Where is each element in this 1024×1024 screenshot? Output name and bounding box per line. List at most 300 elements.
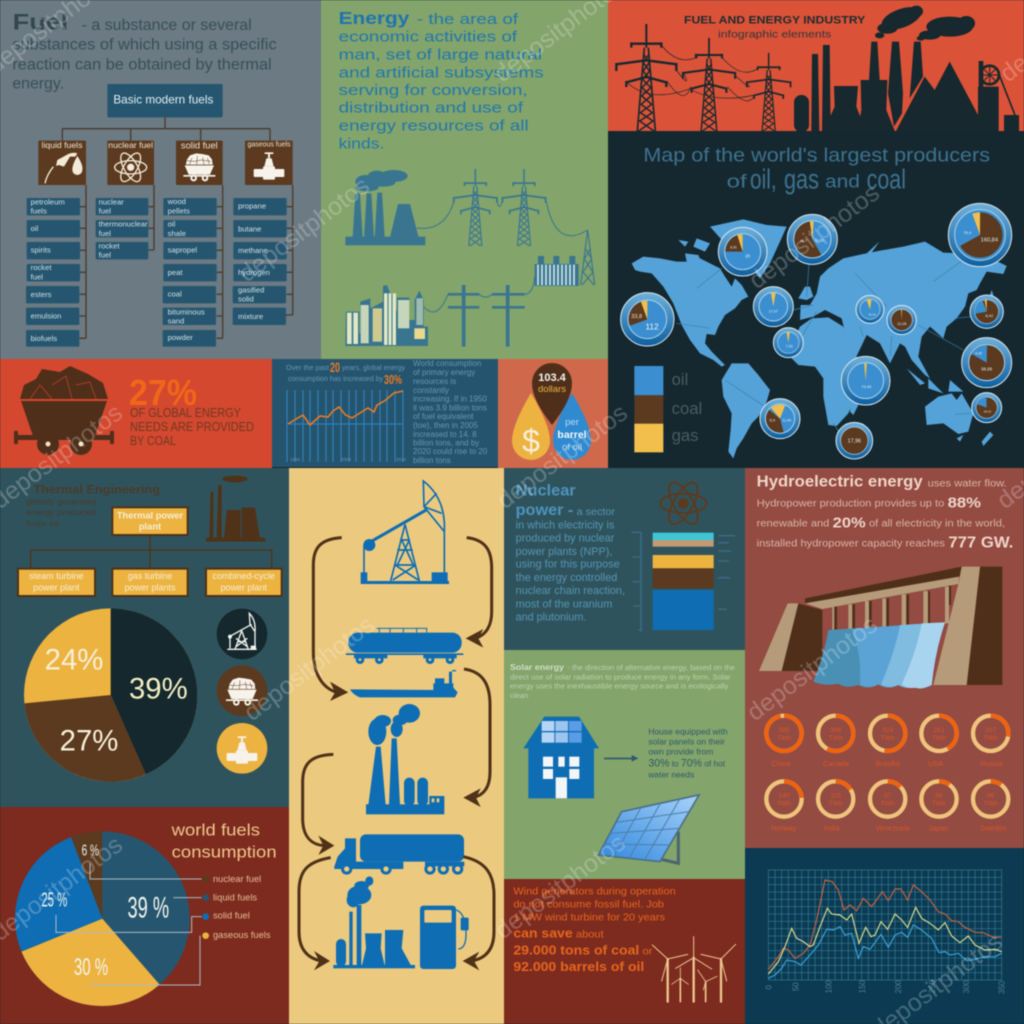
world map <box>632 219 1007 458</box>
drop: blue per barrel: per <box>565 417 579 428</box>
donut: Sweden: 86 <box>987 793 995 800</box>
text: house with solar panels: water needs <box>647 769 694 779</box>
list: gaseous fuels: gasified <box>238 285 264 294</box>
map title: and <box>825 170 860 191</box>
wind text: about <box>576 930 604 941</box>
donut: Canada: TWh <box>829 735 843 742</box>
solar text: clean <box>510 691 528 700</box>
arrow: truck to fuel pump <box>463 857 494 970</box>
bubble: Saudi Arabia: 73,45 <box>861 384 872 389</box>
axis labels: 0 <box>765 985 774 990</box>
list: nuclear fuels <box>96 197 148 260</box>
list: liquid fuels: rocket <box>31 263 52 272</box>
axis labels: 200 <box>894 979 903 993</box>
category: liquid fuels: liquid fuels <box>42 140 83 150</box>
nuclear text: power - <box>516 502 573 519</box>
heading box: basic modern fuels: Basic modern fuels <box>113 93 214 106</box>
energy definition text: Energy <box>339 8 410 28</box>
bubble: Central Asia <box>887 305 916 335</box>
icon: gas valve <box>254 152 284 180</box>
icon: utility poles <box>424 277 535 347</box>
energy definition text: kinds. <box>339 136 384 152</box>
panel: line chart <box>745 848 1024 1024</box>
donut: India: India <box>824 824 841 833</box>
arrow: factory to truck <box>303 754 334 855</box>
bubble: Central Asia: 12,28 <box>897 322 906 326</box>
bubble: USA: 112 <box>645 321 659 331</box>
legend: oil <box>672 370 688 389</box>
line: blue series <box>768 925 1002 978</box>
solar text: Solar energy <box>510 662 564 672</box>
hydro text: Hydropower production provides up to <box>757 499 945 510</box>
solar text: - the direction of alternative energy, based on the <box>567 663 735 672</box>
nuclear text: most of the uranium <box>516 598 612 610</box>
axis labels: 150 <box>858 979 867 993</box>
bubble: South Africa: 17,96 <box>848 439 861 445</box>
icon: thermal plant <box>206 476 265 542</box>
donut: India: 115 <box>830 793 841 800</box>
fuel definition text: energy. <box>12 75 64 92</box>
hydro text <box>757 474 1013 551</box>
energy definition text: distribution and use of <box>339 101 524 117</box>
list: solid fuels: oil <box>168 220 176 229</box>
icon: factory <box>366 704 444 814</box>
hydro text: 20% <box>833 515 866 531</box>
solar text: direct use of solar radiation to produce energy in any form. Solar <box>510 672 731 681</box>
heading: thermal engineering <box>26 482 160 529</box>
heading: world fuels consumption: consumption <box>172 843 277 862</box>
panel: fuel supply flow <box>289 468 504 1024</box>
donut: Norway: TWh <box>777 801 791 808</box>
map title: gas <box>784 163 819 194</box>
transmission towers and wires <box>417 169 595 285</box>
hydro text: Hydroelectric energy <box>757 474 923 491</box>
pie chart: thermal generation: 27% <box>60 725 118 758</box>
donut: Sweden: TWh <box>984 801 998 808</box>
donut: China: TWh <box>777 735 791 742</box>
box: gas turbine <box>112 569 188 596</box>
box: gas turbine: gas turbine <box>128 571 172 581</box>
list: nuclear fuels: fuel <box>99 229 111 238</box>
line: yellow series <box>768 907 1002 974</box>
wind text <box>513 886 676 974</box>
bubble: China: 58,69 <box>981 366 993 371</box>
nuclear text: a sector <box>577 507 616 518</box>
icon: atom <box>660 478 707 528</box>
donut: Japan: 86 <box>935 793 943 800</box>
list: liquid fuels: emulsion <box>31 311 61 320</box>
donut: India: TWh <box>829 801 843 808</box>
box: steam turbine <box>18 569 95 596</box>
chart caption: consumption has increased by <box>288 374 383 383</box>
legend: solid fuel <box>213 911 250 921</box>
text: depositphotos <box>744 179 885 295</box>
heading: world fuels consumption: world fuels <box>171 821 260 840</box>
energy definition text: man, set of large natural <box>339 47 542 63</box>
box: thermal power plant: plant <box>139 521 161 531</box>
hydro text: installed hydropower capacity reaches <box>757 539 945 550</box>
donut: Russia <box>973 716 1008 768</box>
coal statistic <box>129 372 254 448</box>
bubble: South America <box>760 399 800 439</box>
solar text: energy uses the inexhaustible energy source and is ecologically <box>510 682 729 691</box>
illustration: hydro dam <box>759 567 1002 688</box>
axis labels <box>765 979 1006 994</box>
list: liquid fuels: esters <box>31 290 52 299</box>
donut: Brazil: TWh <box>881 735 895 742</box>
energy definition text: and artificial subsystems <box>339 65 544 81</box>
donut: Norway: 140 <box>778 793 790 800</box>
pie chart: fuels consumption: 25 % <box>41 890 67 912</box>
panel: nuclear power <box>504 468 745 650</box>
icon: fuel truck <box>334 834 464 875</box>
chart caption: 20 <box>330 359 340 375</box>
map title: coal <box>867 163 906 194</box>
bubble: China: 8,49 <box>975 352 982 356</box>
bubble: South Africa <box>836 422 873 459</box>
nuclear text: and plutonium. <box>516 611 586 623</box>
pie chart: thermal generation: 39% <box>129 672 188 705</box>
wind text: or <box>642 946 653 957</box>
nuclear text <box>516 483 625 623</box>
text: depositphotos <box>742 611 883 727</box>
list: nuclear fuels: fuel <box>99 251 111 260</box>
energy definition text: - the area of <box>417 12 519 28</box>
fuel definition text: Fuel <box>13 9 68 34</box>
energy definition text: serving for conversion, <box>339 83 528 99</box>
panel: fuel definition and classification <box>0 0 321 359</box>
bubble: Russia <box>948 203 1012 267</box>
bubble: South America: 11,45 <box>782 419 791 423</box>
box: thermal power plant: Thermal power <box>117 510 184 520</box>
energy definition text: economic activities of <box>339 30 518 46</box>
line chart: 2004 <box>341 457 352 462</box>
list: solid fuels <box>163 197 217 347</box>
box: gas turbine: power plants <box>125 582 176 592</box>
text: world consumption: billion tons, and by <box>413 438 479 448</box>
donut: Canada: Canada <box>823 759 850 768</box>
heading: world fuels consumption <box>171 821 277 862</box>
category: gaseous fuels <box>245 141 293 185</box>
donut: USA: USA <box>928 759 943 768</box>
list: liquid fuels: petroleum <box>31 197 65 206</box>
category: liquid fuels <box>38 140 86 185</box>
map title <box>643 146 990 194</box>
donut: Japan: TWh <box>932 801 946 808</box>
donut: Venezuela: 87 <box>884 793 892 800</box>
wind text: 92.000 barrels of oil <box>513 960 644 974</box>
pie chart: fuels consumption: 30 % <box>74 954 108 981</box>
bubble: Russia: 75,4 <box>963 230 972 235</box>
coal statistic: 27% <box>129 372 197 413</box>
donut: USA: 251 <box>933 727 945 734</box>
text: world consumption: World consumption <box>413 359 481 368</box>
category: nuclear fuel <box>107 140 154 185</box>
list: solid fuels: peat <box>168 268 183 277</box>
text: depositphotos <box>234 172 375 288</box>
bubble: Northern Europe <box>787 214 837 264</box>
box: combined cycle: power plant <box>220 582 267 592</box>
icon: coal cart <box>183 153 215 181</box>
text: world consumption: increasing. If in 1950 <box>413 394 487 404</box>
solar text <box>510 662 735 700</box>
wind text: 1 MW wind turbine for 20 years <box>513 913 665 924</box>
icon: city skyline <box>345 285 428 346</box>
nuclear text: Nuclear <box>516 483 576 500</box>
axis labels: 100 <box>825 979 834 993</box>
list: nuclear fuels: rocket <box>99 241 120 250</box>
bubble: Russia: 160,84 <box>981 238 998 244</box>
icon: transformer <box>535 256 579 286</box>
donut: Sweden: Sweden <box>980 824 1007 833</box>
energy definition text <box>339 8 544 152</box>
heading: thermal engineering: globally generated <box>26 497 96 506</box>
list: gaseous fuels: butane <box>238 225 261 234</box>
list: nuclear fuels: nuclear <box>99 197 124 206</box>
bubble: China <box>962 338 1012 388</box>
bubble: West Africa: 7,51 <box>786 344 793 348</box>
axis labels: 300 <box>962 979 971 993</box>
drop: blue per barrel <box>553 393 591 460</box>
text: depositphotos <box>492 399 633 515</box>
nuclear text: produced by nuclear <box>516 533 615 545</box>
bubble: Western Europe: 17,07 <box>769 310 778 314</box>
title <box>684 14 865 40</box>
list: solid fuels: sand <box>168 317 184 326</box>
arrow: ship to factory <box>463 669 490 807</box>
text: world consumption: constantly <box>413 386 449 395</box>
bubble: USA: 33,8 <box>631 314 642 320</box>
panel: solar energy <box>504 650 745 879</box>
silhouette: factories and mine <box>608 2 1024 135</box>
arrow: truck to power plant <box>299 858 331 970</box>
list: liquid fuels <box>26 197 80 347</box>
wind text: can save <box>513 927 573 941</box>
coal statistic: BY COAL <box>130 433 176 448</box>
drop: blue per barrel: barrel <box>557 429 587 441</box>
donut: Venezuela <box>870 781 911 833</box>
energy definition text: energy resources of all <box>339 119 529 135</box>
list: liquid fuels: fuels <box>31 207 47 216</box>
nuclear text: the energy controlled <box>516 572 617 584</box>
text: world consumption: of fuel equivalent <box>413 412 474 421</box>
donut: Japan <box>921 781 957 833</box>
bubble: Northern Europe: 46,7 <box>800 239 807 243</box>
heading box: basic modern fuels <box>107 84 223 117</box>
list: solid fuels: pellets <box>168 206 190 215</box>
line: red series <box>768 880 1002 969</box>
list: nuclear fuels: thermonuclear <box>99 220 148 229</box>
hydro text: of all electricity in the world, <box>869 519 1005 530</box>
list: solid fuels: sapropel <box>168 246 197 255</box>
bubble: Canada: 6,91 <box>730 246 737 250</box>
legend: gaseous fuels <box>213 930 271 940</box>
panel: oil price <box>498 359 608 468</box>
box: combined cycle: combined-cycle <box>212 571 275 581</box>
text: house with solar panels <box>647 726 728 779</box>
icon: wind turbines <box>652 937 736 1002</box>
panel: world producers map <box>608 131 1024 467</box>
icon: gas valve circle <box>217 723 267 774</box>
list: liquid fuels: biofuels <box>31 334 57 343</box>
list: gaseous fuels: mixture <box>238 312 263 321</box>
panel: wind energy <box>504 879 745 1024</box>
icon: rail tank car <box>346 628 463 664</box>
panel: coal share <box>0 359 272 468</box>
donut: China <box>766 716 802 768</box>
icon: power plant with smoke <box>345 170 425 245</box>
text: house with solar panels: House equipped with <box>648 726 728 736</box>
donut: Canada <box>818 716 853 768</box>
box: combined cycle <box>206 569 282 596</box>
bubble: Northern Europe: 51,52 <box>815 238 824 242</box>
heading: thermal engineering: from oil <box>26 520 60 529</box>
wind text: 29.000 tons of coal <box>513 943 639 957</box>
nuclear text: using for this purpose <box>516 559 620 571</box>
donut: Russia: TWh <box>984 735 998 742</box>
line chart: 2014 <box>396 457 407 462</box>
list: liquid fuels: spirits <box>31 246 51 255</box>
nuclear text: in which electricity is <box>516 519 615 531</box>
list: solid fuels: wood <box>167 197 186 206</box>
fuel definition text: substances of which using a specific <box>12 36 277 53</box>
fuel definition text: reaction can be obtained by thermal <box>12 56 272 73</box>
chart caption: 30% <box>384 372 402 387</box>
donut: Brazil: Brasilia <box>876 759 901 768</box>
arrow: pump to ship <box>313 538 348 701</box>
text: house with solar panels: solar panels on their <box>648 736 725 746</box>
wind text: do not consume fossil fuel. Job <box>513 899 664 910</box>
donut: Brazil: 324 <box>882 727 894 734</box>
donut: China: China <box>771 759 791 768</box>
donut: Canada: 369 <box>830 727 842 734</box>
category: solid fuel <box>176 141 223 185</box>
arrow: house to text <box>604 755 638 762</box>
text: depositphotos <box>239 611 380 727</box>
panel: energy definition and power grid <box>321 0 608 359</box>
coal statistic: NEEDS ARE PROVIDED <box>130 419 254 434</box>
text: world consumption: 2020 could rise to 20 <box>413 447 488 456</box>
donut: Brazil <box>870 716 905 768</box>
text: world consumption: billion tons <box>413 456 451 465</box>
map title: oil, <box>750 163 777 194</box>
legend: gas <box>672 426 699 445</box>
bubble: Australia: 19,13 <box>984 410 991 414</box>
list: nuclear fuels: fuel <box>99 207 111 216</box>
panel: energy consumption growth <box>272 359 498 467</box>
icon: solar house <box>523 717 599 798</box>
donut: Japan: Japan <box>928 824 948 833</box>
category: gaseous fuels: gaseous fuels <box>247 142 291 149</box>
legend: coal <box>672 399 702 418</box>
icon: atom <box>115 150 147 185</box>
heading: thermal engineering: energy produced <box>26 508 96 517</box>
text: world consumption: increased to 14. 8 <box>413 430 477 439</box>
fuel definition text <box>12 9 277 92</box>
bubble: Japan: 8,42 <box>985 313 994 318</box>
text: house with solar panels: 30% to 70% of hot <box>648 758 726 770</box>
icon: coal cart circle <box>217 665 267 716</box>
category: nuclear fuel: nuclear fuel <box>108 140 153 150</box>
text: world consumption <box>413 359 488 465</box>
chart caption <box>286 359 405 387</box>
pie chart: fuels consumption: 6 % <box>82 843 99 860</box>
legend <box>634 366 702 452</box>
icon: tanker ship <box>350 670 458 697</box>
donut: USA <box>921 716 957 768</box>
list: gaseous fuels <box>233 198 287 325</box>
chart caption: years, global energy <box>342 363 405 372</box>
box: steam turbine: power plant <box>33 582 80 592</box>
pie chart: fuels consumption <box>15 831 190 1006</box>
text: house with solar panels: own provide from <box>648 746 713 756</box>
panel: hydroelectric energy <box>745 468 1024 848</box>
title: infographic elements <box>718 29 831 40</box>
icon: fuel nozzle and drop <box>45 153 82 183</box>
icon: oil pump jack <box>361 481 449 584</box>
bubble: Saudi Arabia <box>841 356 890 405</box>
text: depositphotos <box>490 829 631 945</box>
box: steam turbine: steam turbine <box>29 571 84 581</box>
drop: brown dollars <box>532 363 572 425</box>
line chart: 1994 <box>290 457 301 462</box>
bubble: USA <box>621 293 674 346</box>
list: solid fuels: shale <box>168 229 186 238</box>
bubble: Middle East North <box>856 295 884 323</box>
hydro text: renewable and <box>757 519 829 530</box>
drop: brown dollars: dollars <box>538 384 566 395</box>
bubble: Middle East North: 16,14 <box>868 312 876 316</box>
donut: Russia: Russia <box>980 759 1004 768</box>
bubble: West Africa <box>773 328 803 358</box>
drop: blue per barrel: of oil <box>562 442 582 453</box>
pie chart: thermal generation <box>24 608 197 782</box>
donut: Norway <box>766 781 802 833</box>
list: liquid fuels: oil <box>31 224 39 233</box>
bubble: Australia <box>972 393 1002 423</box>
nuclear text: power plants (NPP), <box>516 546 612 558</box>
box: thermal power plant <box>112 507 188 535</box>
pie chart: fuels consumption: 39 % <box>127 892 169 925</box>
category: solid fuel: solid fuel <box>181 141 218 151</box>
legend: liquid fuels <box>213 893 257 903</box>
bubble: Canada <box>718 227 767 276</box>
list: gaseous fuels: hydrogen <box>238 268 270 277</box>
bubble: Japan <box>970 295 1003 328</box>
coal statistic: OF GLOBAL ENERGY <box>130 405 241 420</box>
bubble: Western Europe <box>753 287 793 327</box>
transmission towers <box>616 24 791 131</box>
donut: USA: TWh <box>932 735 946 742</box>
list: solid fuels: bituminous <box>168 307 205 316</box>
nuclear text: nuclear chain reaction, <box>516 585 625 597</box>
legend: nuclear fuel <box>213 874 261 884</box>
list: gaseous fuels: propane <box>238 201 266 210</box>
panel: thermal engineering <box>0 468 289 807</box>
fuel definition text: - a substance or several <box>82 17 252 34</box>
icon: coal cart <box>14 366 114 455</box>
donut: Venezuela: Venezuela <box>876 824 911 833</box>
pie chart: thermal generation: 24% <box>45 644 103 677</box>
drop: brown dollars: 103.4 <box>538 372 567 384</box>
legend <box>202 874 271 940</box>
icon: solar panel <box>598 795 699 863</box>
list: liquid fuels: fuel <box>31 272 43 281</box>
bubble: South America: 5,9 <box>770 418 776 423</box>
donut: Sweden <box>973 781 1008 833</box>
line chart <box>287 390 407 462</box>
donut: Venezuela: TWh <box>881 801 895 808</box>
